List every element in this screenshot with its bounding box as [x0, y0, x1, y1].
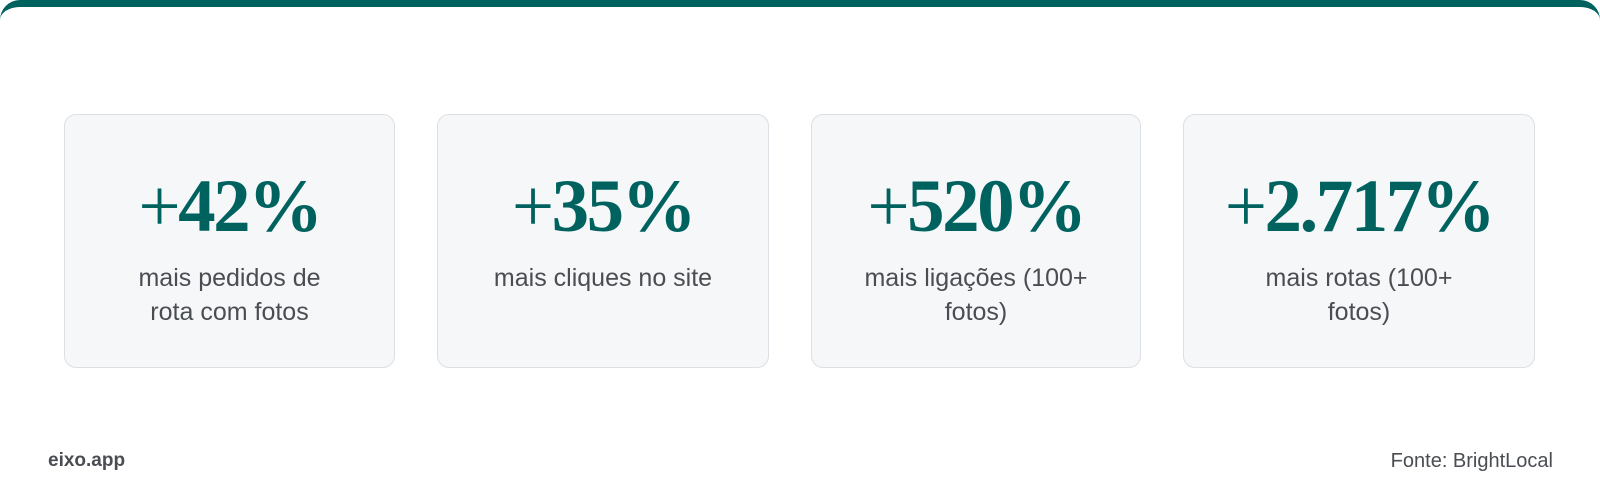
stat number: +35%: [512, 165, 694, 248]
stat label: mais cliques no site: [494, 264, 712, 292]
stat label: mais ligações (100+: [864, 264, 1088, 292]
stat label: fotos): [945, 298, 1007, 326]
stat number: +42%: [138, 165, 321, 248]
stat label: mais rotas (100+: [1266, 264, 1452, 292]
stat label: fotos): [1328, 298, 1390, 326]
card: +520%: [811, 114, 1141, 368]
footer brand: eixo.app: [48, 450, 125, 471]
stat number: +2.717%: [1225, 165, 1493, 248]
stat label: mais pedidos de: [138, 264, 321, 292]
card: +2.717%: [1183, 114, 1535, 368]
stat label: rota com fotos: [150, 298, 309, 326]
card: +35%: [437, 114, 769, 368]
footer source: Fonte: BrightLocal: [1391, 450, 1553, 472]
stat label: [138, 264, 321, 326]
stat label: [1266, 264, 1452, 326]
card: +42%: [64, 114, 395, 368]
stat number: +520%: [867, 165, 1085, 248]
stat label: [864, 264, 1088, 326]
